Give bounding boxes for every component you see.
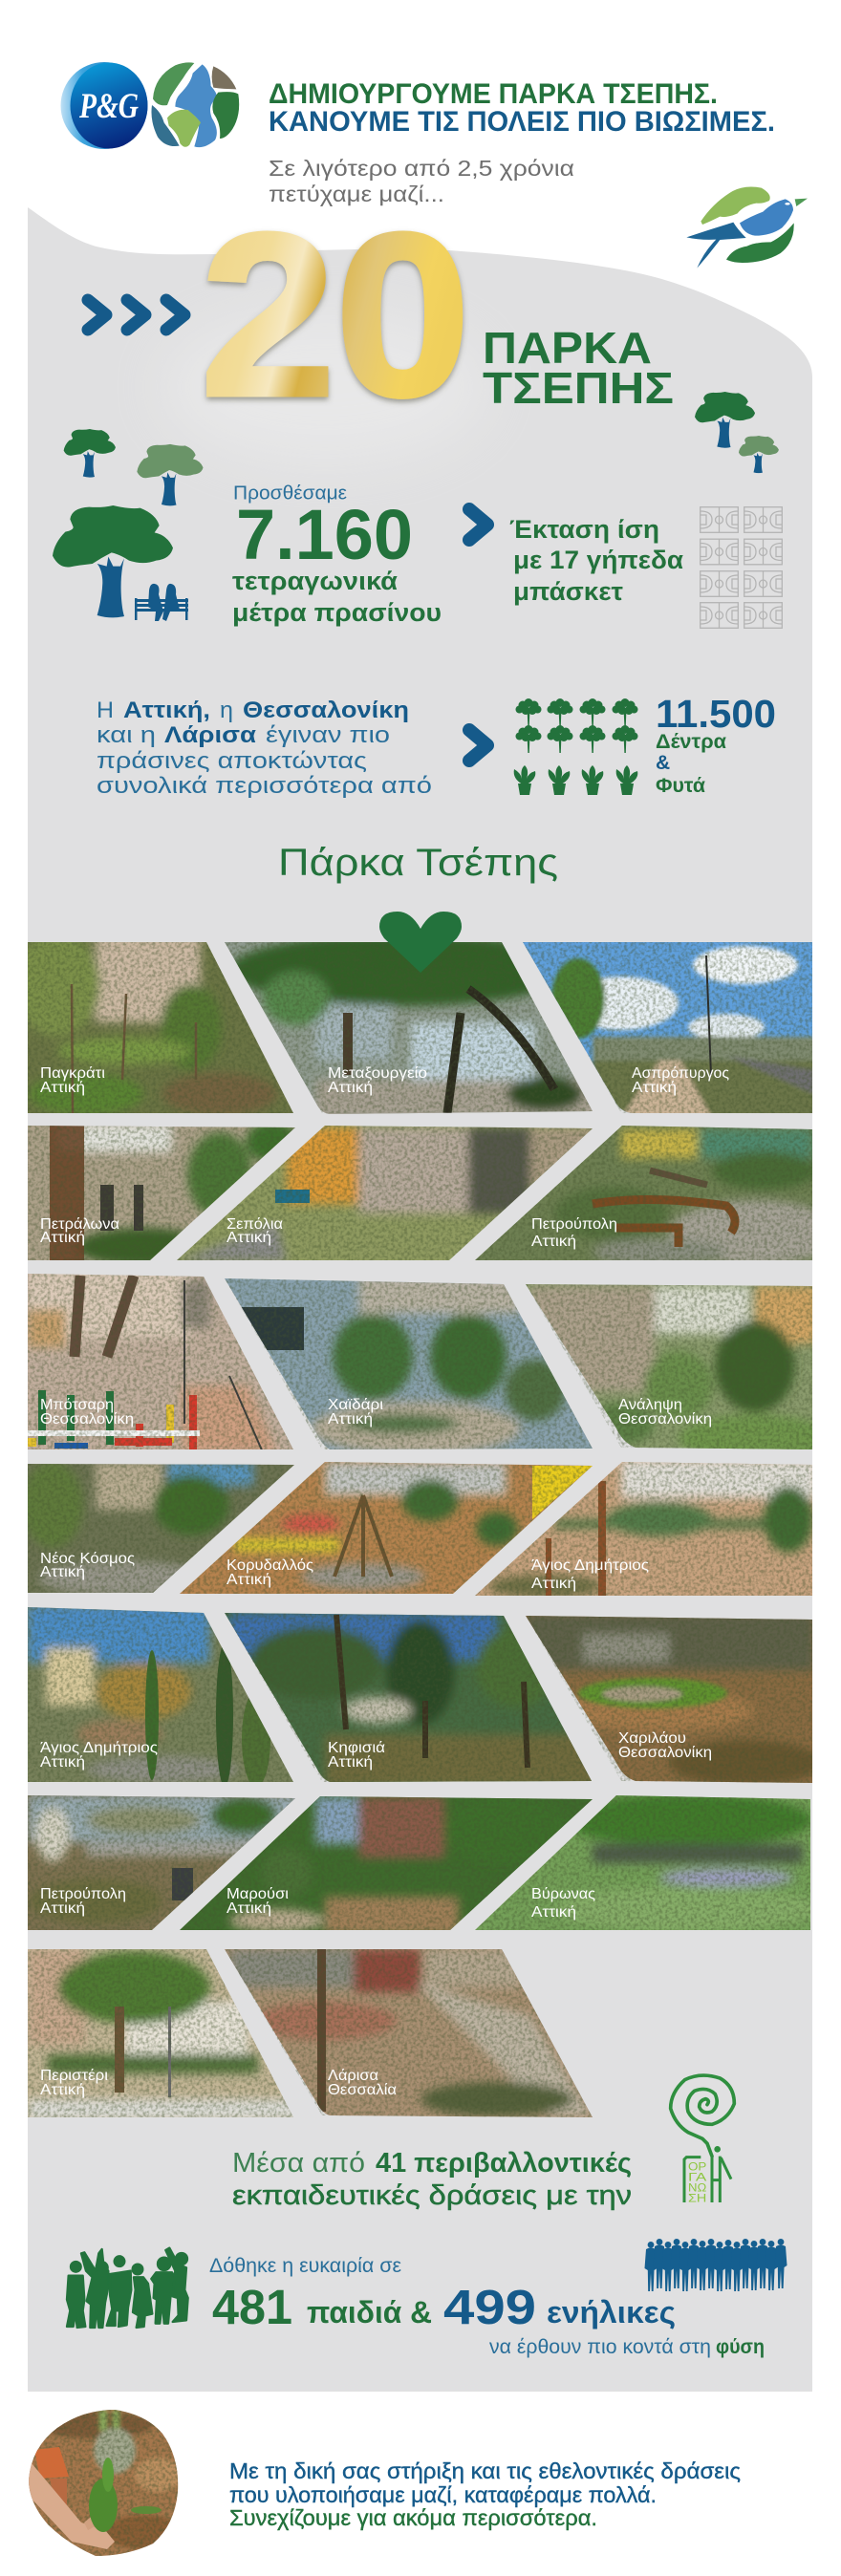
label: Μπότσαρη — [40, 1397, 134, 1428]
text: educational actions — [232, 2148, 632, 2211]
label: Σεπόλια — [226, 1216, 283, 1246]
label: Παγκράτι: Παγκράτι — [40, 1065, 105, 1082]
text: educational actions: 41 περιβαλλοντικές — [376, 2148, 632, 2179]
photo: Μαρούσι — [180, 1795, 597, 1935]
text: closer to nature: να έρθουν πιο κοντά στη — [489, 2336, 711, 2358]
photo: Περιστέρι — [28, 1949, 300, 2120]
text: regions: συνολικά περισσότερα από — [97, 773, 432, 799]
label: Σεπόλια: Αττική — [226, 1230, 271, 1246]
heading: 20 parks label: ΠΑΡΚΑ — [483, 323, 652, 373]
label: Σεπόλια: Σεπόλια — [226, 1216, 283, 1233]
stat: 7.160 square metres: Προσθέσαμε — [233, 483, 347, 504]
heading: parks: Πάρκα Τσέπης — [278, 842, 558, 884]
label: Περιστέρι — [40, 2068, 108, 2098]
logo: Οργάνωση Γη spiral: ΝΩ — [688, 2181, 706, 2195]
photo: Μπότσαρη — [28, 1271, 300, 1452]
label: Πετράλωνα — [40, 1216, 119, 1246]
label: Μπότσαρη: Θεσσαλονίκη — [40, 1411, 134, 1428]
label: Πετράλωνα: Αττική — [40, 1230, 85, 1246]
label: Άγιος Δημήτριος 2: Αττική — [40, 1754, 85, 1771]
label: Άγιος Δημήτριος: Αττική — [531, 1576, 576, 1592]
label: Λάρισα: Θεσσαλία — [328, 2082, 397, 2098]
panel: grey background with wavy top — [28, 207, 812, 2392]
label: Χαριλάου — [618, 1730, 712, 1761]
label: Χαϊδάρι: Χαϊδάρι — [328, 1397, 383, 1413]
stat: 11.500 trees and plants: 11.500 — [656, 692, 776, 736]
label: Πετρούπολη — [531, 1216, 617, 1250]
stat: 11.500 trees and plants: Φυτά — [656, 775, 705, 797]
text: regions: Θεσσαλονίκη — [243, 698, 409, 723]
text: closing statement: Με τη δική σας στήριξη και τις εθελοντικές δράσεις — [229, 2458, 741, 2483]
logo: P&G — [61, 62, 147, 149]
subtitle — [269, 156, 574, 206]
label: Κορυδαλλός: Αττική — [226, 1572, 271, 1588]
photo: Πετρούπολη 2 — [28, 1794, 300, 1931]
photo: Ανάληψη — [526, 1284, 812, 1449]
text: educational actions: εκπαιδευτικές δράσεις με την — [232, 2180, 632, 2211]
text: opportunity intro: Δόθηκε η ευκαιρία σε — [209, 2255, 401, 2277]
icon: children silhouettes — [67, 2248, 188, 2328]
label: Λάρισα: Λάρισα — [328, 2068, 378, 2084]
text: regions: πράσινες αποκτώντας — [97, 748, 367, 774]
icon: adults crowd silhouette — [644, 2239, 787, 2291]
text: closing statement — [229, 2458, 741, 2530]
label: Πετρούπολη 2: Πετρούπολη — [40, 1886, 126, 1902]
label: Νέος Κόσμος — [40, 1551, 135, 1580]
label: Παγκράτι — [40, 1065, 105, 1096]
photo: Παγκράτι — [28, 942, 293, 1113]
label: Χαριλάου: Χαριλάου — [618, 1730, 686, 1747]
label: Ασπρόπυργος: Αττική — [632, 1080, 677, 1096]
text: basketball courts comparison — [509, 515, 683, 606]
label: Άγιος Δημήτριος: Άγιος Δημήτριος — [531, 1557, 649, 1574]
label: Βύρωνας — [531, 1886, 595, 1921]
label: Περιστέρι: Περιστέρι — [40, 2068, 108, 2084]
logo: Οργάνωση Γη spiral: ΣΗ — [688, 2192, 706, 2205]
label: Μαρούσι — [226, 1886, 289, 1917]
photo: Πετράλωνα — [28, 1121, 300, 1266]
icon: trees top right — [695, 392, 779, 473]
logo: Οργάνωση Γη spiral: ΓΑ — [688, 2171, 706, 2184]
label: Περιστέρι: Αττική — [40, 2082, 85, 2098]
text: closing statement: που υλοποιήσαμε μαζί, καταφέραμε πολλά. — [229, 2482, 657, 2507]
label: Μεταξουργείο: Μεταξουργείο — [328, 1065, 427, 1082]
label: Κορυδαλλός — [226, 1557, 313, 1588]
label: Κηφισιά: Κηφισιά — [328, 1740, 385, 1756]
text: closing statement: Συνεχίζουμε για ακόμα περισσότερα. — [229, 2505, 597, 2530]
title — [269, 78, 775, 138]
label: Πετρούπολη: Πετρούπολη — [531, 1216, 617, 1233]
photo: Χαϊδάρι — [225, 1276, 597, 1455]
arrow: chevron — [469, 730, 487, 761]
text: basketball courts comparison: μπάσκετ — [513, 577, 623, 606]
stat: 11.500 trees and plants: & — [656, 752, 670, 774]
logo: globe — [151, 62, 239, 147]
photo: Άγιος Δημήτριος — [475, 1460, 817, 1598]
label: Μεταξουργείο: Αττική — [328, 1080, 373, 1096]
photo: Λάρισα — [225, 1949, 597, 2119]
text: regions: και η — [97, 722, 156, 748]
stat: 7.160 square metres: 7.160 — [236, 495, 413, 574]
logo: Οργάνωση Γη spiral — [671, 2075, 734, 2205]
label: Κηφισιά — [328, 1740, 385, 1771]
label: Άγιος Δημήτριος 2 — [40, 1740, 158, 1771]
label: Κορυδαλλός: Κορυδαλλός — [226, 1557, 313, 1574]
label: Πετρούπολη: Αττική — [531, 1234, 576, 1250]
label: Μαρούσι: Αττική — [226, 1900, 271, 1917]
label: Χαϊδάρι — [328, 1397, 383, 1428]
text: regions: έγιναν πιο — [266, 722, 390, 748]
heading: 20 parks label — [483, 323, 674, 413]
text: educational actions: Μέσα από — [232, 2148, 365, 2179]
label: Μαρούσι: Μαρούσι — [226, 1886, 289, 1902]
text: regions: Αττική, — [123, 698, 210, 723]
label: Μπότσαρη: Μπότσαρη — [40, 1397, 114, 1413]
label: Μεταξουργείο — [328, 1065, 427, 1096]
title: ΚΑΝΟΥΜΕ ΤΙΣ ΠΟΛΕΙΣ ΠΙΟ ΒΙΩΣΙΜΕΣ. — [269, 106, 775, 138]
stat: children and adults: 481 — [212, 2280, 292, 2334]
label: Ασπρόπυργος — [632, 1065, 729, 1096]
label: Νέος Κόσμος: Αττική — [40, 1564, 85, 1580]
stat: 7.160 square metres: μέτρα πρασίνου — [232, 598, 442, 627]
label: Ανάληψη: Θεσσαλονίκη — [618, 1411, 712, 1428]
photo: Πετρούπολη — [475, 1126, 812, 1260]
stat: 11.500 trees and plants — [656, 692, 776, 797]
icon: basketball courts — [701, 507, 782, 628]
stat: 11.500 trees and plants: Δέντρα — [656, 731, 726, 753]
text: basketball courts comparison: Έκταση ίση — [509, 515, 659, 544]
icon: three chevrons — [88, 300, 184, 330]
label: Βύρωνας: Βύρωνας — [531, 1886, 595, 1902]
icon: bird — [686, 187, 808, 268]
stat: children and adults: παιδιά & — [307, 2295, 432, 2329]
label: Άγιος Δημήτριος 2: Άγιος Δημήτριος — [40, 1740, 158, 1756]
photo: Κηφισιά — [225, 1613, 602, 1787]
photo: Μεταξουργείο — [225, 934, 602, 1118]
text: closer to nature: φύση — [716, 2336, 765, 2358]
label: Παγκράτι: Αττική — [40, 1080, 85, 1096]
label: Ασπρόπυργος: Ασπρόπυργος — [632, 1065, 729, 1082]
subtitle: πετύχαμε μαζί... — [269, 182, 444, 206]
text: regions: η — [220, 698, 233, 723]
photo: Άγιος Δημήτριος 2 — [28, 1605, 300, 1787]
stat: children and adults: 499 — [443, 2280, 536, 2334]
stat: children and adults: ενήλικες — [547, 2295, 676, 2329]
stat: children and adults — [212, 2280, 676, 2334]
label: Χαριλάου: Θεσσαλονίκη — [618, 1745, 712, 1761]
label: Βύρωνας: Αττική — [531, 1904, 576, 1921]
arrow: chevron — [469, 509, 487, 540]
photo: Κορυδαλλός — [180, 1462, 597, 1596]
heading: 20 parks label: ΤΣΕΠΗΣ — [483, 363, 674, 413]
title: ΔΗΜΙΟΥΡΓΟΥΜΕ ΠΑΡΚΑ ΤΣΕΠΗΣ. — [269, 78, 718, 110]
label: Άγιος Δημήτριος — [531, 1557, 649, 1592]
big number 20: 20 — [201, 186, 470, 444]
photo: Ασπρόπυργος — [523, 942, 822, 1118]
label: Ανάληψη: Ανάληψη — [618, 1397, 682, 1413]
label: Χαϊδάρι: Αττική — [328, 1411, 373, 1428]
icon: trees and plants — [514, 698, 638, 795]
text: regions — [97, 698, 432, 799]
label: Πετράλωνα: Πετράλωνα — [40, 1216, 119, 1233]
stat: 7.160 square metres: τετραγωνικά — [232, 567, 398, 595]
text: regions: Λάρισα — [164, 722, 256, 748]
label: Κηφισιά: Αττική — [328, 1754, 373, 1771]
text: basketball courts comparison: με 17 γήπεδα — [513, 546, 683, 574]
logo: Οργάνωση Γη spiral: ΟΡ — [688, 2160, 706, 2174]
photo: Βύρωνας — [475, 1793, 822, 1932]
text: regions: Η — [97, 698, 114, 723]
logo: P&G: P&G — [78, 87, 139, 126]
label: Νέος Κόσμος: Νέος Κόσμος — [40, 1551, 135, 1567]
label: Πετρούπολη 2: Αττική — [40, 1900, 85, 1917]
photo: Χαριλάου — [526, 1613, 822, 1786]
label: Πετρούπολη 2 — [40, 1886, 126, 1917]
subtitle: Σε λιγότερο από 2,5 χρόνια — [269, 156, 574, 181]
icon: trees and bench — [53, 429, 204, 621]
photo: Σεπόλια — [177, 1126, 597, 1261]
icon: down chevron heart — [379, 912, 462, 973]
stat: 7.160 square metres — [232, 483, 442, 627]
label: Λάρισα — [328, 2068, 397, 2098]
photo: Νέος Κόσμος — [22, 1462, 300, 1596]
label: Ανάληψη — [618, 1397, 712, 1428]
photo: hands planting — [29, 2410, 178, 2556]
